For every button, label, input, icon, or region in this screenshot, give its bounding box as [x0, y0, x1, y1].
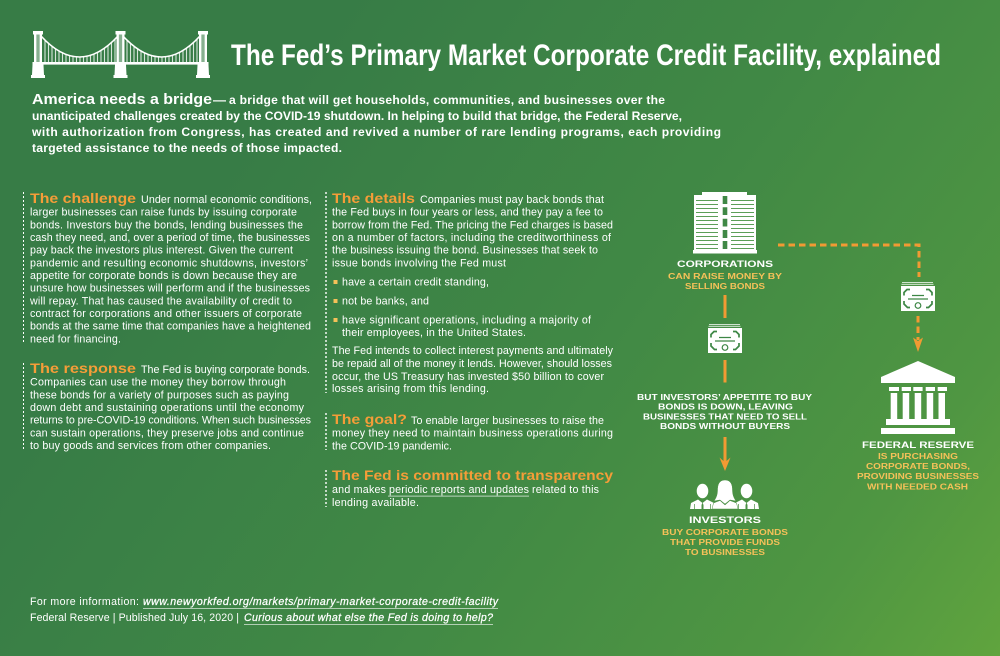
- panel: the response: Companies can use the money they borrow through: [30, 377, 286, 389]
- panel: the response: to buy goods and services from other companies.: [30, 440, 271, 452]
- panel: transparency: [326, 468, 614, 509]
- panel: the details: [326, 191, 614, 395]
- footer text: www.newyorkfed.org/markets/primary-market-corporate-credit-facility: [143, 596, 499, 608]
- panel: the response: returns to pre-COVID-19 conditions. When such businesses: [30, 415, 311, 427]
- heading: transparency: The Fed is committed to transparency: [332, 468, 614, 483]
- panel: the response: these bonds for a variety of purposes such as paying: [30, 389, 289, 401]
- panel: the response: can sustain operations, they preserve jobs and continue: [30, 427, 304, 439]
- bullet list: their employees, in the United States.: [342, 327, 526, 339]
- panel: the challenge: Under normal economic conditions,: [141, 194, 312, 206]
- panel: transparency: and makes: [332, 484, 386, 496]
- panel: the response: down debt and sustaining operations until the economy: [30, 402, 305, 414]
- footer text: Curious about what else the Fed is doing to help?: [244, 612, 493, 624]
- panel: the details: occur, the US Treasury has invested $50 billion to cover: [332, 371, 604, 383]
- label: investors: [662, 515, 789, 557]
- label: investors: TO BUSINESSES: [685, 548, 766, 557]
- panel: the details: issue bonds involving the Fed must: [332, 257, 506, 269]
- panel: the details: the Fed buys in four years or less, and they pay a fee to: [332, 207, 603, 219]
- panel: the challenge: bonds. Investors buy the bonds, lending businesses the: [30, 219, 303, 231]
- panel: the details: borrow from the Fed. The pricing the Fed charges is based: [332, 219, 613, 231]
- bullet list: [334, 276, 591, 339]
- icon: federal reserve building: [881, 361, 955, 434]
- footer text: For more information:: [30, 596, 139, 608]
- bullet list: have significant operations, including a majority of: [342, 314, 591, 326]
- panel: the challenge: bonds at the same time that companies have a heightened: [30, 321, 311, 333]
- panel: the challenge: cash they need, and, over a period of time, the businesses: [30, 232, 310, 244]
- label: investor appetite note: BUT INVESTORS’ APPETITE TO BUY: [637, 393, 813, 402]
- line: bond to investors text: [724, 360, 726, 382]
- panel: the challenge: larger businesses can raise funds by issuing corporate: [30, 207, 297, 219]
- icon: corporate building: [693, 192, 757, 254]
- icon: bond right: [901, 282, 935, 311]
- panel: the details: on a number of factors, including the creditworthiness of: [332, 232, 611, 244]
- label: investors: THAT PROVIDE FUNDS: [670, 538, 781, 547]
- label: investor appetite note: BONDS WITHOUT BUYERS: [660, 422, 791, 431]
- arrow: down to investors: [720, 437, 730, 471]
- panel: the details: Companies must pay back bonds that: [420, 194, 604, 206]
- label: corporations: CAN RAISE MONEY BY: [668, 272, 783, 281]
- footer text: Federal Reserve | Published July 16, 2020 |: [30, 612, 239, 624]
- arrow: corporations to bond: [724, 295, 726, 318]
- label: investor appetite note: [637, 393, 813, 431]
- heading: the challenge: The challenge: [30, 191, 137, 206]
- panel: the details: the business issuing the bond. Businesses that seek to: [332, 245, 598, 257]
- panel: the goal: money they need to maintain business operations during: [332, 428, 613, 440]
- intro text block: a bridge that will get households, communities, and businesses over the: [229, 93, 665, 107]
- intro text block: unanticipated challenges created by the COVID-19 shutdown. In helping to build that bridge, the Federal Reserve,: [32, 109, 682, 123]
- label: corporations: SELLING BONDS: [685, 282, 766, 291]
- label: investors: BUY CORPORATE BONDS: [662, 528, 789, 537]
- label: federal reserve: PROVIDING BUSINESSES: [857, 472, 980, 481]
- panel: the challenge: pay back the investors plus interest. Given the current: [30, 245, 293, 257]
- footer text: [30, 596, 499, 625]
- panel: the details: The Fed intends to collect interest payments and ultimately: [332, 345, 614, 357]
- panel: the goal: the COVID-19 pandemic.: [332, 440, 452, 452]
- label: federal reserve: CORPORATE BONDS,: [866, 462, 970, 471]
- bullet list: have a certain credit standing,: [342, 276, 489, 288]
- panel: transparency: related to this: [532, 484, 599, 496]
- intro text block: targeted assistance to the needs of those impacted.: [32, 141, 342, 155]
- arrow: corporations to fed, dashed: [778, 245, 919, 277]
- link: periodic reports and updates: periodic reports and updates: [389, 484, 529, 496]
- icon: suspension bridge: [31, 31, 210, 78]
- label: investor appetite note: BUSINESSES THAT NEED TO SELL: [643, 412, 807, 422]
- panel: the challenge: unsure how businesses will perform and if the businesses: [30, 283, 310, 295]
- intro text block: America needs a bridge: [32, 92, 212, 108]
- heading: the response: The response: [30, 361, 137, 376]
- panel: the goal: [326, 412, 613, 452]
- panel: the challenge: will repay. That has caused the availability of credit to: [29, 295, 292, 307]
- intro text block: [31, 92, 721, 155]
- label: corporations: CORPORATIONS: [677, 259, 773, 269]
- intro text block: with authorization from Congress, has created and revived a number of rare lending programs, each providing: [31, 125, 721, 139]
- label: corporations: [668, 259, 783, 291]
- intro text block: —: [213, 93, 227, 107]
- panel: the challenge: pandemic and resulting economic shutdowns, investors’: [30, 257, 308, 269]
- icon: investors: [690, 480, 759, 509]
- panel: the details: losses arising from this lending.: [332, 383, 489, 395]
- label: federal reserve: IS PURCHASING: [878, 452, 958, 461]
- label: investors: INVESTORS: [689, 515, 761, 525]
- panel: the challenge: contract for corporations and other issuers of corporate: [30, 308, 302, 320]
- panel: the challenge: [24, 191, 312, 345]
- bullet list: not be banks, and: [342, 296, 429, 308]
- panel: the challenge: appetite for corporate bonds is down because they are: [30, 270, 297, 282]
- icon: bond left: [708, 324, 742, 353]
- label: federal reserve: [857, 440, 980, 492]
- panel: the response: The Fed is buying corporate bonds.: [141, 364, 310, 376]
- label: federal reserve: WITH NEEDED CASH: [867, 482, 968, 492]
- panel: the goal: To enable larger businesses to raise the: [411, 415, 604, 427]
- heading: the goal: The goal?: [332, 412, 407, 427]
- panel: the details: be repaid all of the money it lends. However, should losses: [332, 358, 612, 370]
- label: federal reserve: FEDERAL RESERVE: [862, 440, 974, 450]
- panel: the response: [24, 361, 311, 452]
- panel: transparency: lending available.: [332, 497, 419, 509]
- heading: the details: The details: [332, 191, 415, 206]
- arrow: bond to fed, dashed: [913, 316, 923, 352]
- panel: the challenge: need for financing.: [30, 333, 121, 345]
- label: investor appetite note: BONDS IS DOWN, LEAVING: [658, 402, 793, 412]
